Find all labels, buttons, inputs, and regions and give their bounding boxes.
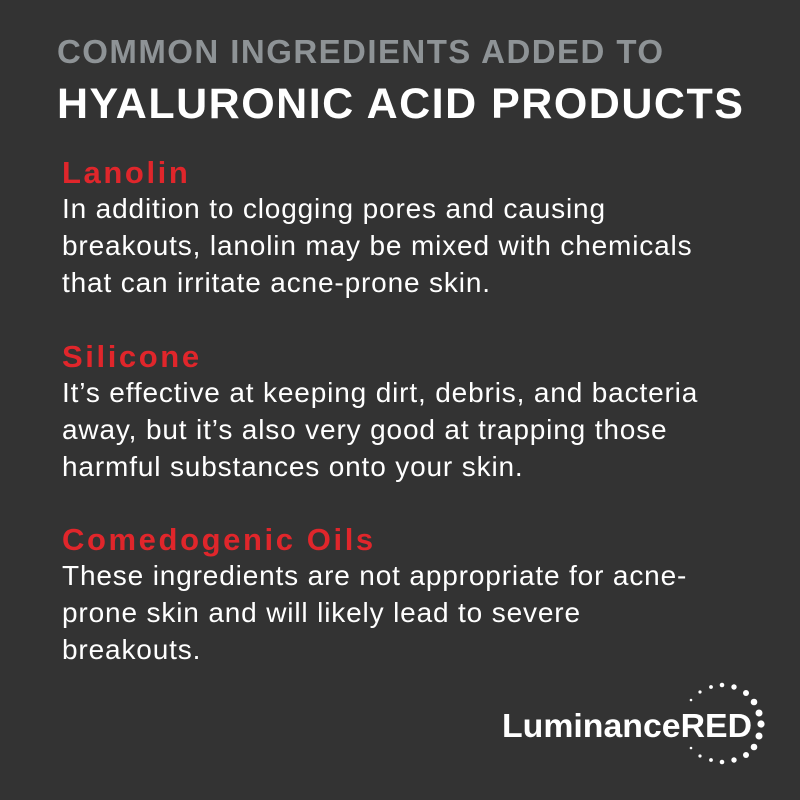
text: silicone [62, 377, 698, 482]
text: silicone: away, but it’s also very good at trapping those [62, 414, 667, 445]
logo [502, 682, 765, 764]
text: silicone: harmful substances onto your skin. [62, 451, 524, 482]
text: comedogenic oils: breakouts. [62, 634, 201, 665]
text: comedogenic oils: These ingredients are not appropriate for acne- [62, 560, 687, 591]
heading: lanolin: Lanolin [62, 155, 190, 190]
text: lanolin: In addition to clogging pores and causing [62, 193, 606, 224]
text: comedogenic oils [62, 560, 687, 665]
text: silicone: It’s effective at keeping dirt, debris, and bacteria [62, 377, 698, 408]
heading: silicone: Silicone [62, 339, 202, 374]
section: comedogenic oils [62, 522, 687, 665]
text: comedogenic oils: prone skin and will likely lead to severe [62, 597, 581, 628]
logo: LuminanceRED [502, 707, 752, 744]
title line 2: HYALURONIC ACID PRODUCTS [57, 80, 744, 128]
heading: comedogenic oils: Comedogenic Oils [62, 522, 376, 557]
section: silicone [62, 339, 698, 482]
text: lanolin [62, 193, 692, 298]
section: lanolin [62, 155, 692, 298]
title line 1: COMMON INGREDIENTS ADDED TO [57, 33, 664, 70]
text: lanolin: breakouts, lanolin may be mixed with chemicals [62, 230, 692, 261]
text: lanolin: that can irritate acne-prone skin. [62, 267, 491, 298]
